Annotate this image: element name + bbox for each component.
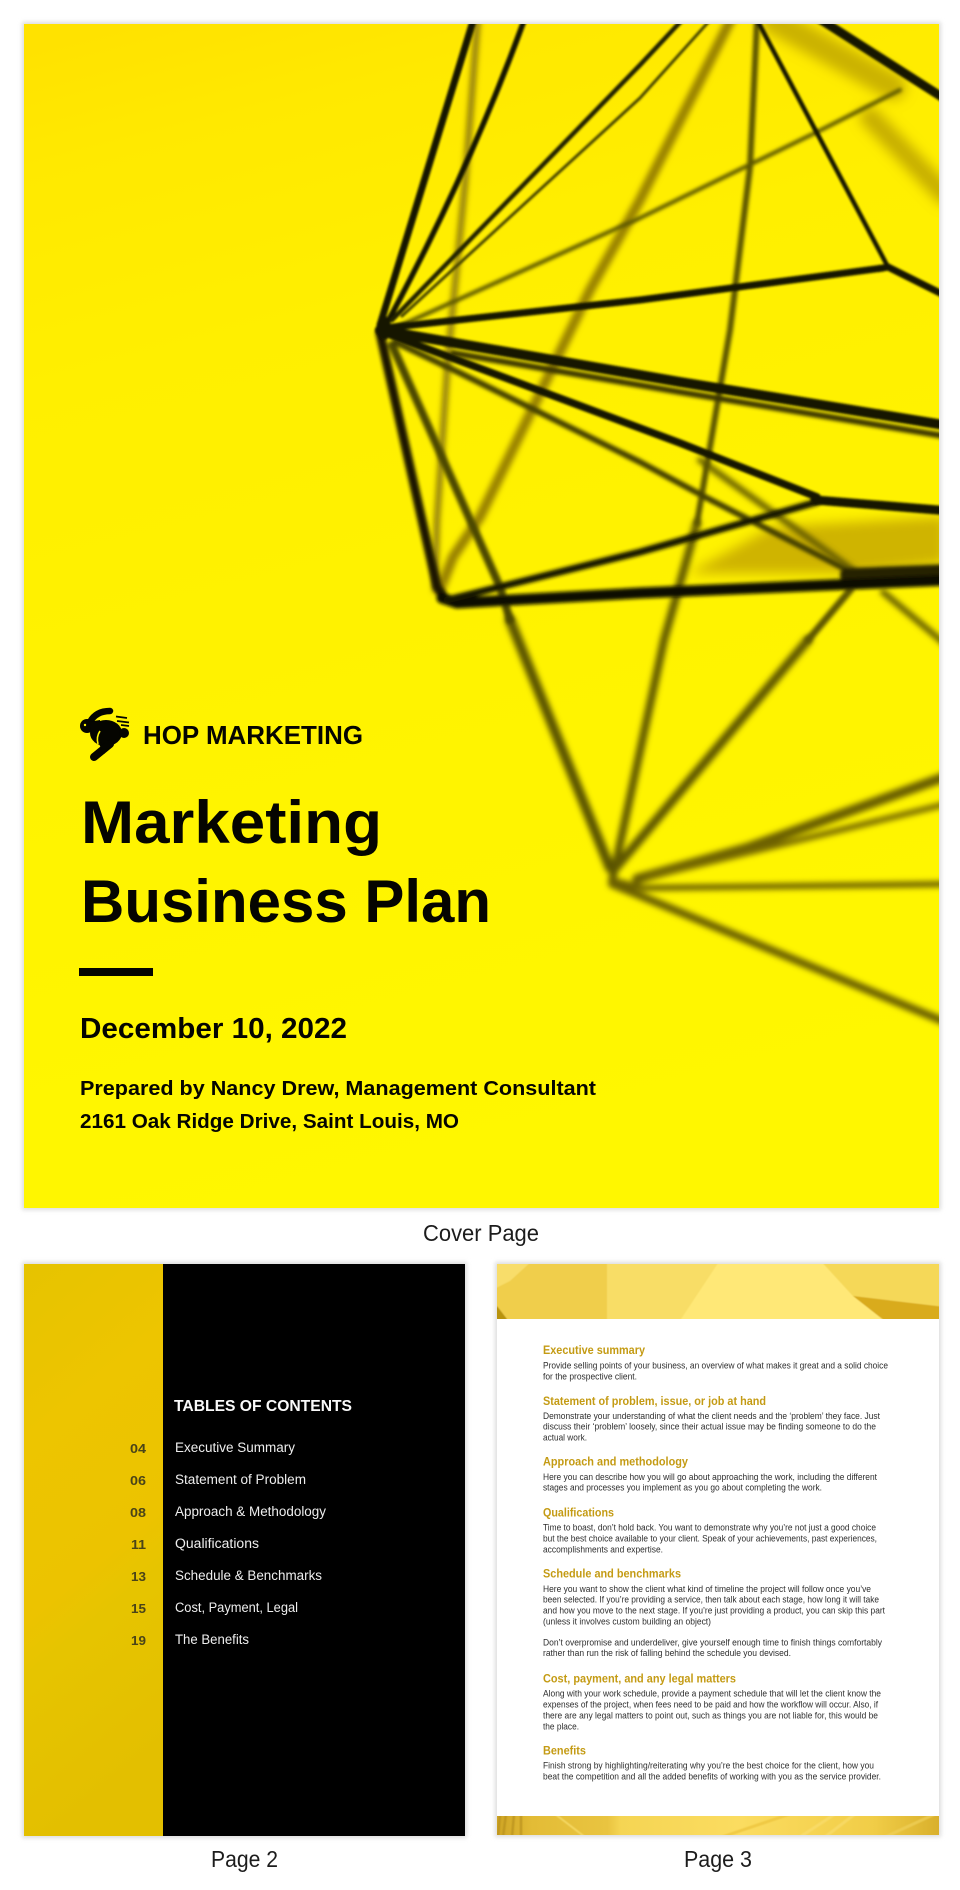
date: December 10, 2022 xyxy=(80,1013,347,1045)
section: qualifications xyxy=(543,1507,877,1554)
image: yellow paper footer strip xyxy=(497,1816,939,1835)
section: schedule and benchmarks xyxy=(543,1568,885,1658)
prepared by block: Prepared by Nancy Drew, Management Consultant xyxy=(80,1078,596,1100)
contents entries: Approach & Methodology xyxy=(175,1504,326,1519)
section: schedule and benchmarks: Schedule and benchmarks xyxy=(543,1568,681,1580)
section: cost payment legal: the place. xyxy=(543,1721,579,1731)
page numbers: 06 xyxy=(130,1473,146,1488)
icon: running rabbit logo xyxy=(80,711,129,757)
caption: page 3: Page 3 xyxy=(684,1846,752,1872)
black column xyxy=(163,1264,465,1836)
page numbers: 19 xyxy=(131,1633,146,1648)
section: qualifications: accomplishments and expertise. xyxy=(543,1544,663,1554)
contents entries xyxy=(175,1440,326,1647)
page numbers: 11 xyxy=(131,1537,146,1552)
caption: page 2: Page 2 xyxy=(211,1846,278,1872)
section: schedule and benchmarks: Here you want to show the client what kind of timeline the project will follow once you’ve xyxy=(543,1584,871,1594)
title: Business Plan xyxy=(81,868,491,935)
prepared by block xyxy=(80,1078,596,1133)
prepared by block: 2161 Oak Ridge Drive, Saint Louis, MO xyxy=(80,1111,459,1133)
section: benefits: Finish strong by highlighting/reiterating why you’re the best choice for the client, how you xyxy=(543,1761,874,1771)
contents entries: Schedule & Benchmarks xyxy=(175,1568,322,1583)
section: cost payment legal: expenses of the project, when fees need to be paid and how the workflow will occur. Also, if xyxy=(543,1700,878,1710)
page numbers: 13 xyxy=(131,1569,146,1584)
title xyxy=(81,789,491,935)
image: yellow paper header xyxy=(497,1264,939,1319)
section: cost payment legal: Cost, payment, and any legal matters xyxy=(543,1673,736,1685)
section: executive summary xyxy=(543,1345,888,1381)
section: cost payment legal xyxy=(543,1673,881,1731)
section: qualifications: Time to boast, don’t hold back. You want to demonstrate why you’re not just a good choice xyxy=(543,1523,876,1533)
logo wordmark: HOP MARKETING xyxy=(143,720,363,750)
section: benefits: beat the competition and all the added benefits of working with you as the service provider. xyxy=(543,1772,881,1782)
section: schedule and benchmarks: Don’t overpromise and underdeliver, give yourself enough time to finish things comfortably xyxy=(543,1637,882,1647)
title: Marketing xyxy=(81,789,382,856)
image: blurred geometric wire frame xyxy=(377,15,950,1024)
contents entries: Qualifications xyxy=(175,1536,259,1551)
panel: page 2 table of contents xyxy=(22,1262,467,1838)
page numbers xyxy=(130,1441,147,1648)
section: approach and methodology xyxy=(543,1457,877,1493)
section: approach and methodology: stages and processes you implement as you go about completing the work. xyxy=(543,1483,822,1493)
section: qualifications: but the best choice available to your client. Speak of your achievements, past experiences, xyxy=(543,1534,877,1544)
section: cost payment legal: Along with your work schedule, provide a payment schedule that will let the client know the xyxy=(543,1689,881,1699)
caption: cover page: Cover Page xyxy=(423,1220,539,1246)
section: approach and methodology: Approach and methodology xyxy=(543,1457,689,1469)
contents entries: Cost, Payment, Legal xyxy=(175,1600,298,1615)
yellow column xyxy=(24,1264,163,1836)
section: benefits: Benefits xyxy=(543,1745,586,1757)
page numbers: 04 xyxy=(130,1441,147,1456)
section: benefits xyxy=(543,1745,881,1782)
section: statement of problem: actual work. xyxy=(543,1433,587,1443)
contents entries: Executive Summary xyxy=(175,1440,295,1455)
section: executive summary: Provide selling points of your business, an overview of what makes it great and a solid choice xyxy=(543,1361,888,1371)
section: executive summary: Executive summary xyxy=(543,1345,646,1357)
section: schedule and benchmarks: (unless it involves custom building an object) xyxy=(543,1616,711,1626)
contents entries: The Benefits xyxy=(175,1632,249,1647)
panel: page 3 summary xyxy=(490,1260,945,1837)
section: approach and methodology: Here you can describe how you will go about approaching the work, including the different xyxy=(543,1472,877,1482)
section: schedule and benchmarks: rather than run the risk of falling behind the schedule you devised. xyxy=(543,1648,791,1658)
section: statement of problem: Statement of problem, issue, or job at hand xyxy=(543,1396,766,1408)
page numbers: 15 xyxy=(131,1601,146,1616)
section: schedule and benchmarks: and how you move to the next stage. If you’re just providing a product, you can skip this part xyxy=(543,1606,885,1616)
section: statement of problem: discuss their ‘problem’ loosely, since their actual issue may be finding someone to do the xyxy=(543,1422,876,1432)
section: statement of problem xyxy=(543,1396,880,1443)
title rule xyxy=(79,968,153,976)
section: cost payment legal: there are any legal matters to point out, such as things you are not liable for, this would be xyxy=(543,1711,878,1721)
section: qualifications: Qualifications xyxy=(543,1507,614,1519)
contents entries: Statement of Problem xyxy=(175,1472,306,1487)
page numbers: 08 xyxy=(130,1505,146,1520)
section: schedule and benchmarks: been selected. If you’re providing a service, then talk about each stage, how long it will take xyxy=(543,1595,879,1605)
section: executive summary: for the prospective client. xyxy=(543,1371,637,1381)
panel: cover page xyxy=(22,15,950,1210)
heading: tables of contents: TABLES OF CONTENTS xyxy=(174,1398,352,1415)
section: statement of problem: Demonstrate your understanding of what the client needs and the ‘problem’ they face. Just xyxy=(543,1411,880,1421)
